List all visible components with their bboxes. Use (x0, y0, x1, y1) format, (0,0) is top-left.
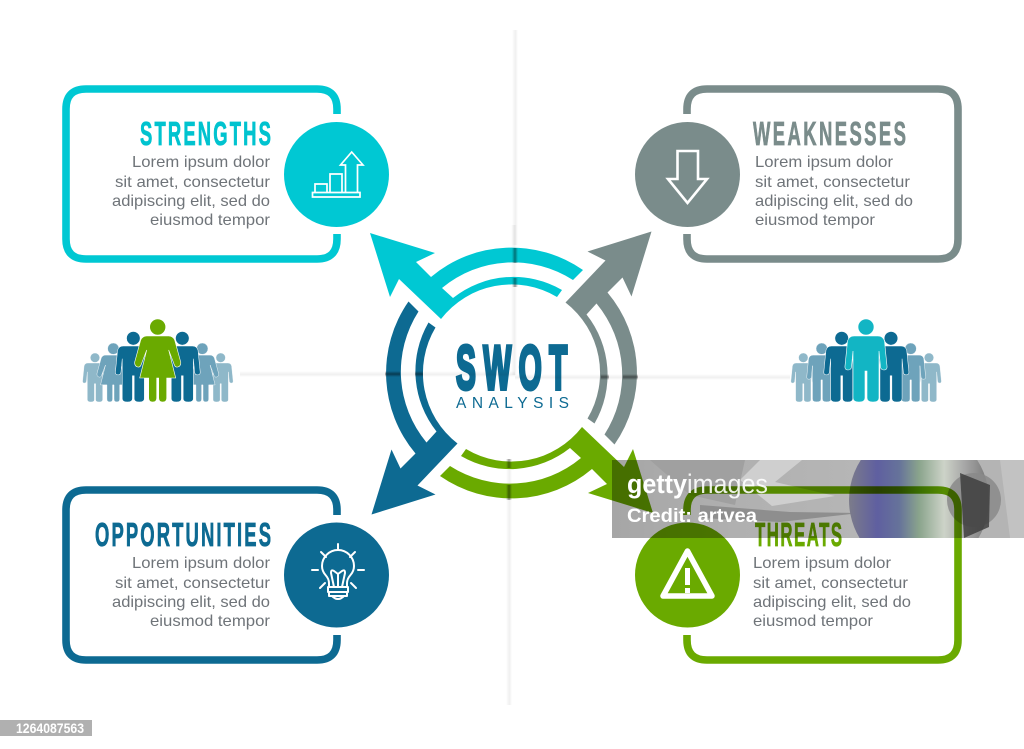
text block: opportunities (112, 555, 271, 630)
person: right man (873, 332, 909, 402)
text block: threats: Lorem ipsum dolor (753, 555, 892, 572)
watermark text: Credit: artvea (627, 506, 757, 527)
text block: weaknesses: adipiscing elit, sed do (755, 193, 913, 210)
panel: weaknesses (635, 89, 958, 259)
text block: threats: sit amet, consectetur (753, 575, 909, 592)
text block: opportunities: adipiscing elit, sed do (112, 594, 270, 611)
person: central woman (135, 319, 181, 402)
person: far right (917, 353, 941, 402)
panel outline: threats (687, 490, 958, 660)
person: left woman (97, 343, 130, 402)
watermark band (612, 460, 1024, 538)
heading: strengths: STRENGTHS (140, 115, 271, 152)
person: far right (208, 353, 233, 402)
person: left man (115, 332, 151, 402)
text block: weaknesses: eiusmod tempor (755, 212, 876, 229)
text block: strengths: adipiscing elit, sed do (112, 193, 270, 210)
text block: strengths: eiusmod tempor (150, 212, 271, 229)
panel outline: opportunities (66, 490, 337, 660)
person: central man (845, 319, 887, 402)
icon: warning triangle (635, 522, 740, 628)
watermark text: gettyimages (627, 469, 768, 499)
arrow ring: opportunities (372, 302, 458, 514)
panel outline: weaknesses (687, 89, 958, 259)
panel: strengths (66, 89, 389, 259)
person: right man (164, 332, 200, 402)
text block: strengths (112, 154, 271, 229)
text block: threats (753, 555, 911, 630)
person: left man (824, 332, 860, 402)
text block: opportunities: Lorem ipsum dolor (132, 555, 271, 572)
text block: strengths: sit amet, consectetur (115, 174, 271, 191)
title: SWOT analysis: SWOT (456, 334, 568, 403)
panel outline: strengths (66, 89, 337, 259)
person: inner left (807, 343, 837, 402)
text block: weaknesses: sit amet, consectetur (755, 174, 911, 191)
people group: woman leader (83, 319, 233, 402)
arrow ring: strengths (370, 233, 583, 319)
watermark text (627, 469, 768, 527)
text block: strengths: Lorem ipsum dolor (132, 154, 271, 171)
person: inner right (896, 343, 926, 402)
heading: weaknesses: WEAKNESSES (753, 115, 906, 152)
person: far left (791, 353, 816, 402)
text block: threats: eiusmod tempor (753, 613, 874, 630)
image id tag: 1264087563 (16, 721, 84, 736)
people group: man leader (791, 319, 941, 402)
text block: weaknesses: Lorem ipsum dolor (755, 154, 894, 171)
heading: opportunities: OPPORTUNITIES (95, 516, 271, 553)
title: SWOT analysis: ANALYSIS (456, 395, 569, 412)
arrow ring: weaknesses (566, 232, 652, 444)
text block: threats: adipiscing elit, sed do (753, 594, 911, 611)
text block: opportunities: eiusmod tempor (150, 613, 271, 630)
person: far left (83, 353, 107, 402)
arrow ring: threats (440, 427, 653, 513)
panel: threats (635, 490, 958, 660)
text block: weaknesses (755, 154, 913, 229)
icon: down arrow (635, 122, 740, 227)
heading: threats: THREATS (755, 516, 842, 554)
panel: opportunities (66, 490, 389, 660)
person: right woman (186, 343, 219, 402)
icon: rising bar chart (284, 122, 389, 227)
text block: opportunities: sit amet, consectetur (115, 575, 271, 592)
icon: light bulb (284, 522, 389, 628)
